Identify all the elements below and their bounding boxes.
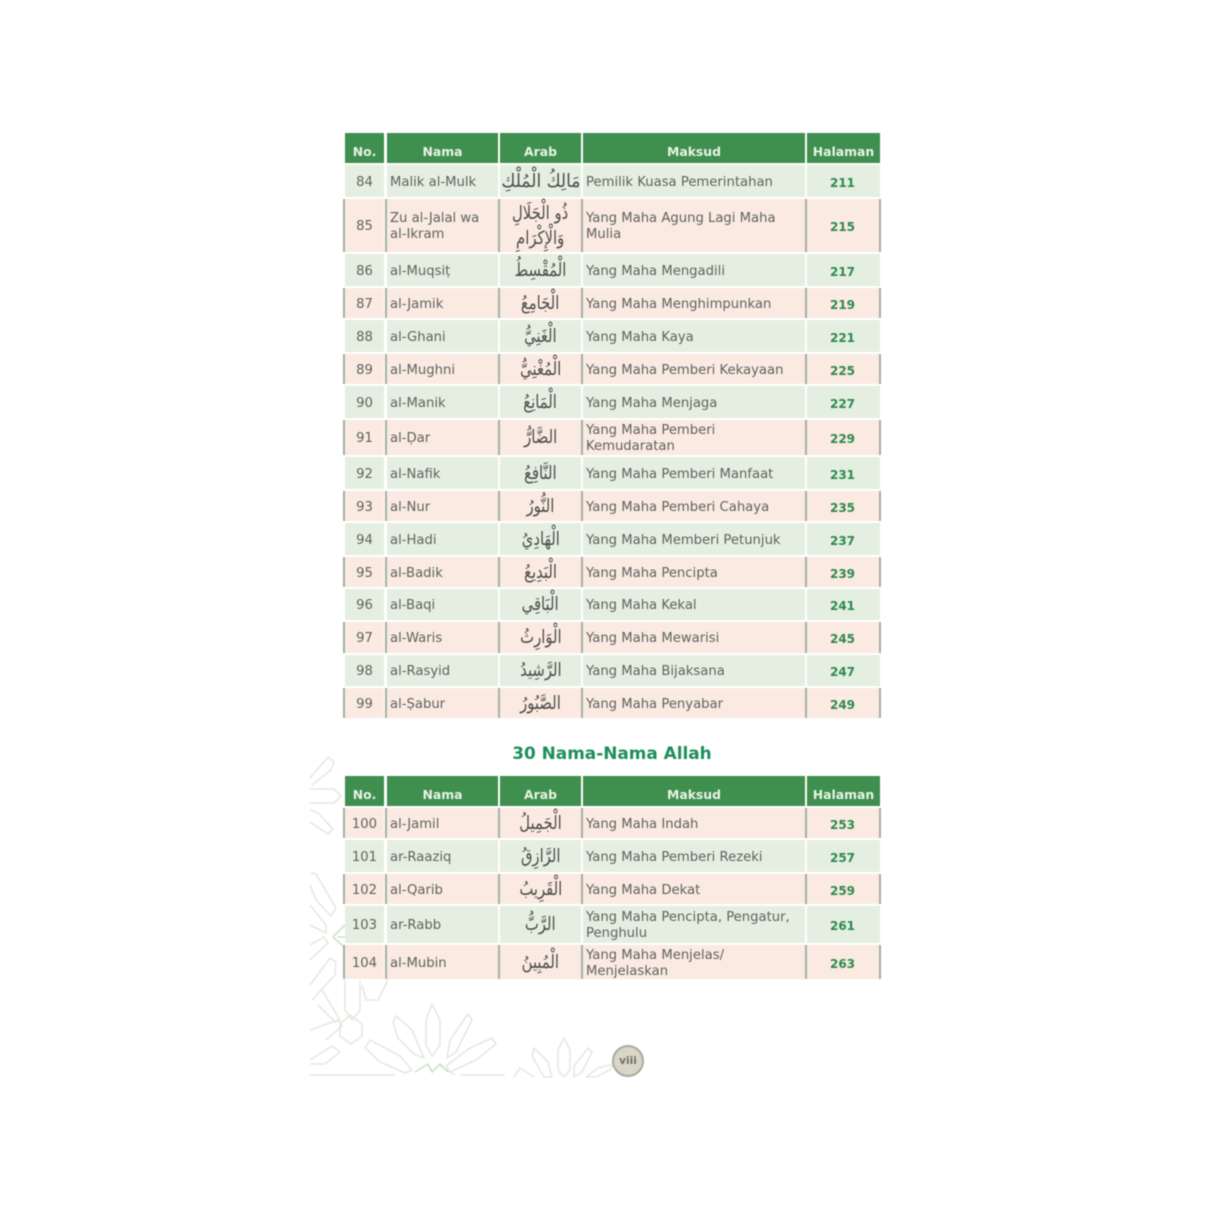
row 86 <box>344 254 880 286</box>
row 102 <box>342 874 882 904</box>
row 85: Zu al-Jalal wa <box>390 211 479 226</box>
row 85: 85 <box>356 219 373 234</box>
row 86: 86 <box>356 264 373 278</box>
row 102: الْقَرِيبُ <box>519 878 562 900</box>
row 96: 96 <box>356 598 373 613</box>
row 88 <box>344 320 880 352</box>
row 94: الْهَادِيُ <box>521 528 560 550</box>
row 104: 104 <box>352 956 377 970</box>
row 98 <box>344 654 880 686</box>
row 100: Yang Maha Indah <box>586 816 698 832</box>
row 95: al-Badik <box>390 566 443 580</box>
table: names 84-99 <box>342 132 882 718</box>
row 85 <box>342 198 882 253</box>
row 94: 237 <box>830 534 855 548</box>
row 100: al-Jamil <box>390 816 439 832</box>
row 101: ar-Raaziq <box>390 850 451 864</box>
row 88: 88 <box>356 330 373 344</box>
row 101: 257 <box>830 850 855 864</box>
row 92: النَّافِعُ <box>524 462 557 484</box>
row 91: Kemudaratan <box>586 439 675 454</box>
row 87: 87 <box>356 296 373 312</box>
table header row: Arab <box>524 144 557 159</box>
row 88: Yang Maha Kaya <box>586 330 694 344</box>
row 104: al-Mubin <box>390 956 447 970</box>
row 100: 100 <box>352 816 377 832</box>
row 96: الْبَاقِي <box>522 594 559 615</box>
row 89: 89 <box>356 362 373 378</box>
page number badge: viii <box>619 1055 637 1067</box>
row 91: al-Ḍar <box>390 431 430 446</box>
row 104: Menjelaskan <box>586 964 668 978</box>
row 86: الْمُقْسِطُ <box>515 260 566 280</box>
row 98: Yang Maha Bijaksana <box>586 664 725 679</box>
row 85: ذُو الْجَلَالِ <box>512 203 569 224</box>
row 97: 97 <box>356 631 373 646</box>
row 99 <box>342 688 882 718</box>
row 90 <box>344 386 880 418</box>
row 84: مَالِكُ الْمُلْكِ <box>501 170 580 192</box>
row 103: 261 <box>830 919 855 933</box>
row 89 <box>342 354 882 384</box>
row 87 <box>342 288 882 318</box>
row 90: 227 <box>830 396 855 410</box>
row 92: 92 <box>356 466 373 482</box>
row 104: الْمُبِينُ <box>522 952 559 972</box>
row 88: الْغَنِيُّ <box>524 326 557 346</box>
row 98: 247 <box>830 665 855 679</box>
row 89: Yang Maha Pemberi Kekayaan <box>586 362 783 378</box>
row 85: وَالْإِكْرَامِ <box>516 228 565 249</box>
row 96 <box>344 588 880 620</box>
row 94: Yang Maha Memberi Petunjuk <box>586 532 781 548</box>
row 90: 90 <box>356 396 373 410</box>
second table header row: Arab <box>524 787 557 802</box>
table header row: Maksud <box>667 144 721 159</box>
row 100: الْجَمِيلُ <box>519 812 562 834</box>
row 88: al-Ghani <box>390 330 446 344</box>
row 91: 229 <box>830 432 855 446</box>
row 92: al-Nafik <box>390 466 440 482</box>
row 104: Yang Maha Menjelas/ <box>586 948 724 962</box>
row 99: Yang Maha Penyabar <box>586 696 723 712</box>
row 96: Yang Maha Kekal <box>586 598 697 613</box>
row 103: 103 <box>352 918 377 933</box>
row 91: Yang Maha Pemberi <box>586 423 715 438</box>
row 90: Yang Maha Menjaga <box>586 396 717 410</box>
row 93: النُّورُ <box>527 496 554 516</box>
row 84: 211 <box>830 176 855 190</box>
row 103 <box>344 906 880 944</box>
row 99: 99 <box>356 696 373 712</box>
row 93: 235 <box>830 500 855 514</box>
second table header row <box>344 775 881 807</box>
row 98: al-Rasyid <box>390 664 450 679</box>
row 98: 98 <box>356 664 373 679</box>
row 102: 259 <box>830 884 855 898</box>
row 85: Mulia <box>586 227 621 242</box>
row 97 <box>342 622 882 654</box>
table: names 100-104 <box>342 775 882 980</box>
row 94 <box>344 522 880 556</box>
row 84 <box>344 164 880 198</box>
row 91 <box>342 420 882 456</box>
row 87: al-Jamik <box>390 296 443 312</box>
row 94: 94 <box>356 532 373 548</box>
row 85: Yang Maha Agung Lagi Maha <box>586 211 776 226</box>
row 87: Yang Maha Menghimpunkan <box>586 296 771 312</box>
row 104: 263 <box>830 956 855 970</box>
row 90: الْمَانِعُ <box>524 392 557 412</box>
row 93: Yang Maha Pemberi Cahaya <box>586 500 769 514</box>
row 94: al-Hadi <box>390 532 437 548</box>
row 95: 95 <box>356 566 373 580</box>
second table header row: Halaman <box>813 787 874 802</box>
row 95: الْبَدِيعُ <box>524 562 557 582</box>
row 103: الرَّبُّ <box>525 914 556 935</box>
row 99: الصَّبُورُ <box>520 692 561 714</box>
row 97: الْوَارِثُ <box>520 627 561 648</box>
decorative floral ornament <box>309 756 613 1078</box>
row 85: 215 <box>830 220 855 234</box>
row 96: al-Baqi <box>390 598 435 613</box>
table header row: Nama <box>422 144 462 159</box>
row 97: al-Waris <box>390 631 442 646</box>
row 102: al-Qarib <box>390 882 443 898</box>
table header row: No. <box>353 144 376 159</box>
row 97: Yang Maha Mewarisi <box>586 631 719 646</box>
page number badge <box>612 1045 644 1077</box>
row 93: 93 <box>356 500 373 514</box>
row 86: al-Muqsiṭ <box>390 264 450 278</box>
row 93: al-Nur <box>390 500 430 514</box>
row 103: ar-Rabb <box>390 918 441 933</box>
row 100: 253 <box>830 818 855 832</box>
row 84: 84 <box>356 174 373 190</box>
row 89: al-Mughni <box>390 362 455 378</box>
row 102: Yang Maha Dekat <box>586 882 700 898</box>
table header row: Halaman <box>813 144 874 159</box>
row 84: Malik al-Mulk <box>390 174 476 190</box>
row 96: 241 <box>830 599 855 613</box>
row 101: 101 <box>352 850 377 864</box>
second table header row: Nama <box>422 787 462 802</box>
row 95 <box>342 556 882 588</box>
row 100 <box>342 808 882 838</box>
row 89: 225 <box>830 364 855 378</box>
row 104 <box>342 944 882 980</box>
row 102: 102 <box>352 882 377 898</box>
row 99: 249 <box>830 698 855 712</box>
row 103: Penghulu <box>586 926 647 941</box>
row 92 <box>344 456 880 490</box>
row 98: الرَّشِيدُ <box>520 660 561 681</box>
section heading: 30 Nama-Nama Allah <box>512 743 712 763</box>
row 91: الضَّارُّ <box>524 427 557 448</box>
row 87: 219 <box>830 298 855 312</box>
row 92: 231 <box>830 468 855 482</box>
row 89: الْمُغْنِيُّ <box>520 358 561 380</box>
row 84: Pemilik Kuasa Pemerintahan <box>586 174 773 190</box>
row 103: Yang Maha Pencipta, Pengatur, <box>586 910 790 925</box>
second table header row: No. <box>353 787 376 802</box>
row 99: al-Ṣabur <box>390 696 445 712</box>
row 85: al-Ikram <box>390 227 444 242</box>
row 88: 221 <box>830 330 855 344</box>
row 101: Yang Maha Pemberi Rezeki <box>586 850 763 864</box>
row 101 <box>344 840 880 872</box>
row 95: Yang Maha Pencipta <box>586 566 718 580</box>
row 91: 91 <box>356 431 373 446</box>
row 101: الرَّازِقُ <box>521 846 560 866</box>
row 95: 239 <box>830 566 855 580</box>
row 86: 217 <box>830 264 855 278</box>
table header row <box>344 132 881 164</box>
second table header row: Maksud <box>667 787 721 802</box>
row 86: Yang Maha Mengadili <box>586 264 725 278</box>
row 90: al-Manik <box>390 396 446 410</box>
row 97: 245 <box>830 632 855 646</box>
row 93 <box>342 490 882 522</box>
row 87: الْجَامِعُ <box>521 292 560 314</box>
row 92: Yang Maha Pemberi Manfaat <box>586 466 773 482</box>
